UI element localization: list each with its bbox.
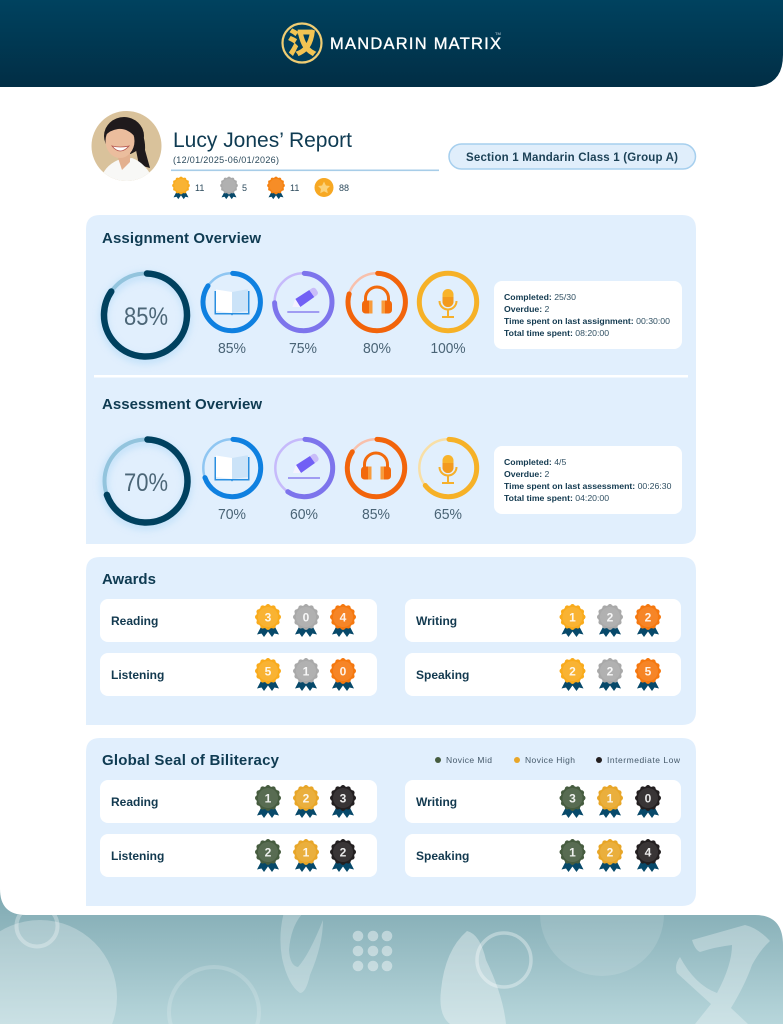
- assessment stats card: Time spent on last assessment: 00:26:30: [504, 481, 672, 491]
- row: speaking: 2: [569, 664, 576, 678]
- awards heading: Awards: [102, 571, 156, 588]
- main assignment ring: [103, 272, 188, 360]
- assessment stats card: Completed: 4/5: [504, 457, 566, 467]
- silver total: [220, 177, 247, 199]
- writing ring: 75%: [289, 340, 317, 357]
- header band: [0, 0, 783, 87]
- class pill: Section 1 Mandarin Class 1 (Group A): [466, 152, 678, 164]
- row: reading: 0: [303, 610, 310, 624]
- gold total: [172, 177, 204, 199]
- reading ring: [202, 438, 262, 523]
- row: listening: Listening: [111, 849, 164, 863]
- row: writing: Writing: [416, 614, 457, 628]
- logo wordmark: MANDARIN MATRIX: [330, 35, 501, 53]
- listening ring: 80%: [363, 340, 391, 357]
- listening ring: 85%: [362, 506, 390, 523]
- date range: (12/01/2025-06/01/2026): [173, 155, 279, 165]
- badge totals: [172, 177, 349, 199]
- profile section: [90, 110, 439, 199]
- assessment heading: Assessment Overview: [102, 396, 262, 413]
- panel: global seal of biliteracy: [86, 738, 696, 906]
- trademark: TM: [495, 31, 501, 36]
- row: listening: Listening: [111, 668, 164, 682]
- row: writing: 1: [607, 792, 614, 806]
- assignment stats card: Total time spent: 08:20:00: [504, 328, 609, 338]
- speaking ring: 65%: [434, 506, 462, 523]
- writing ring: 60%: [290, 506, 318, 523]
- row: speaking: [405, 653, 681, 696]
- speaking ring: [418, 438, 478, 523]
- reading ring: 70%: [218, 506, 246, 523]
- speaking ring: [419, 273, 477, 357]
- row: reading: 3: [340, 792, 347, 806]
- row: reading: 2: [303, 792, 310, 806]
- row: writing: 2: [607, 610, 614, 624]
- row: reading: Reading: [111, 614, 158, 628]
- assessment stats card: Overdue: 2: [504, 469, 550, 479]
- row: speaking: 5: [645, 664, 652, 678]
- assignment stats card: Overdue: 2: [504, 304, 550, 314]
- footer decorative shapes: [0, 915, 770, 1024]
- row: listening: [100, 834, 377, 877]
- avatar photo: [90, 110, 164, 182]
- row: writing: 3: [569, 792, 576, 806]
- row: reading: [100, 780, 377, 823]
- row: writing: Writing: [416, 795, 457, 809]
- row: speaking: 2: [607, 846, 614, 860]
- reading ring: 85%: [218, 340, 246, 357]
- assignment stats card: Completed: 25/30: [504, 292, 576, 302]
- row: reading: 4: [340, 610, 347, 624]
- legend: [435, 755, 681, 765]
- assessment stats card: Total time spent: 04:20:00: [504, 493, 609, 503]
- row: writing: 1: [569, 610, 576, 624]
- panel: awards: [86, 557, 696, 725]
- row: reading: 1: [265, 792, 272, 806]
- writing ring: [274, 438, 334, 523]
- assignment stats card: Time spent on last assignment: 00:30:00: [504, 316, 670, 326]
- row: listening: 2: [265, 846, 272, 860]
- row: listening: 1: [303, 846, 310, 860]
- row: reading: 3: [265, 610, 272, 624]
- row: writing: 0: [645, 792, 652, 806]
- row: speaking: 4: [645, 846, 652, 860]
- reading ring: [202, 272, 261, 357]
- row: writing: [405, 780, 681, 823]
- row: listening: 1: [303, 664, 310, 678]
- row: speaking: Speaking: [416, 849, 469, 863]
- legend: Novice Mid: [446, 755, 492, 765]
- assignment heading: Assignment Overview: [102, 230, 261, 247]
- logo emblem: 汉: [288, 22, 316, 62]
- row: listening: 2: [340, 846, 347, 860]
- report title: Lucy Jones’ Report: [173, 129, 352, 152]
- logo: [282, 22, 501, 62]
- legend: Intermediate Low: [607, 755, 681, 765]
- row: writing: [405, 599, 681, 642]
- silver total: 5: [242, 183, 247, 193]
- row: speaking: [405, 834, 681, 877]
- row: speaking: 2: [607, 664, 614, 678]
- assessment stats card: [494, 446, 682, 514]
- bronze total: [267, 177, 299, 199]
- row: speaking: 1: [569, 846, 576, 860]
- row: speaking: Speaking: [416, 668, 469, 682]
- bronze total: 11: [290, 183, 299, 193]
- row: writing: 2: [645, 610, 652, 624]
- panel: overview: [86, 215, 696, 544]
- row: listening: 5: [265, 664, 272, 678]
- row: reading: [100, 599, 377, 642]
- row: listening: [100, 653, 377, 696]
- gold total: 11: [195, 183, 204, 193]
- class pill: [449, 144, 696, 169]
- star total: 88: [339, 183, 349, 193]
- footer band: [0, 880, 783, 1024]
- main assessment ring: [103, 438, 189, 526]
- listening ring: [347, 272, 406, 357]
- star total: [314, 178, 349, 197]
- seal heading: Global Seal of Biliteracy: [102, 752, 280, 769]
- assignment stats card: [494, 281, 682, 349]
- main assessment ring: 70%: [124, 469, 168, 497]
- listening ring: [346, 438, 406, 523]
- legend: Novice High: [525, 755, 575, 765]
- row: listening: 0: [340, 664, 347, 678]
- row: reading: Reading: [111, 795, 158, 809]
- speaking ring: 100%: [430, 340, 466, 357]
- title underline: [171, 170, 439, 171]
- writing ring: [274, 272, 333, 357]
- main assignment ring: 85%: [124, 303, 168, 331]
